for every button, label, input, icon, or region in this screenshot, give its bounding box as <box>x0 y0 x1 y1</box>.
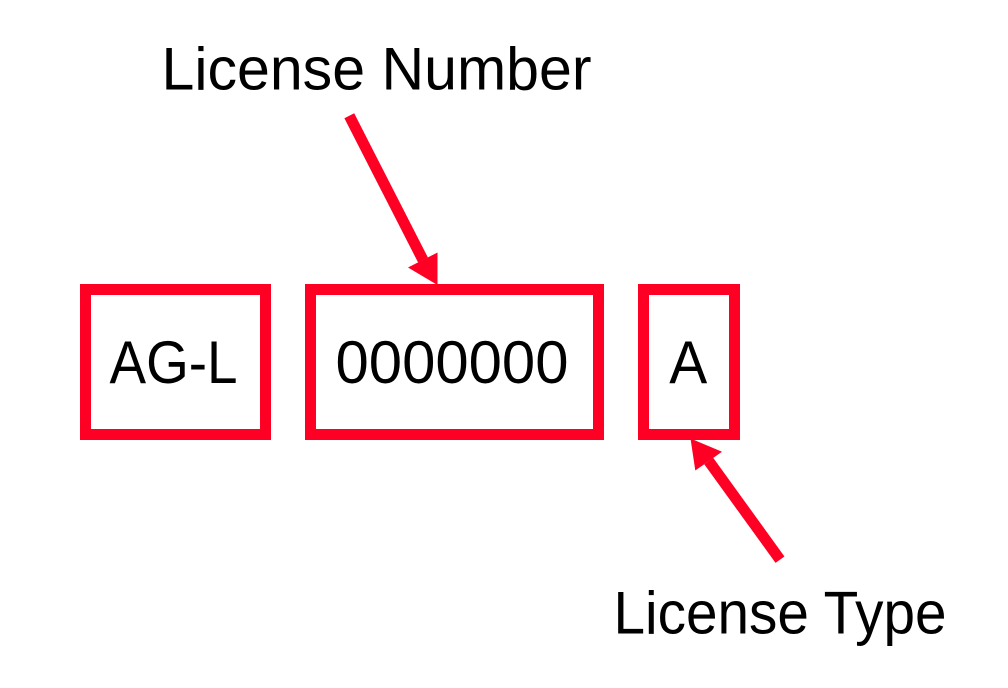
arrow: to license number box <box>349 116 438 285</box>
box: 0000000 number <box>310 290 598 434</box>
box: AG-L prefix <box>86 290 266 434</box>
heading: License Number: License Number <box>162 36 592 102</box>
heading: License Type: License Type <box>614 580 946 646</box>
box: A type <box>644 290 734 434</box>
box: A type: A <box>669 329 707 396</box>
box: 0000000 number: 0000000 <box>336 329 568 396</box>
arrow: to license type box <box>690 438 780 560</box>
box: AG-L prefix: AG-L <box>110 329 238 396</box>
